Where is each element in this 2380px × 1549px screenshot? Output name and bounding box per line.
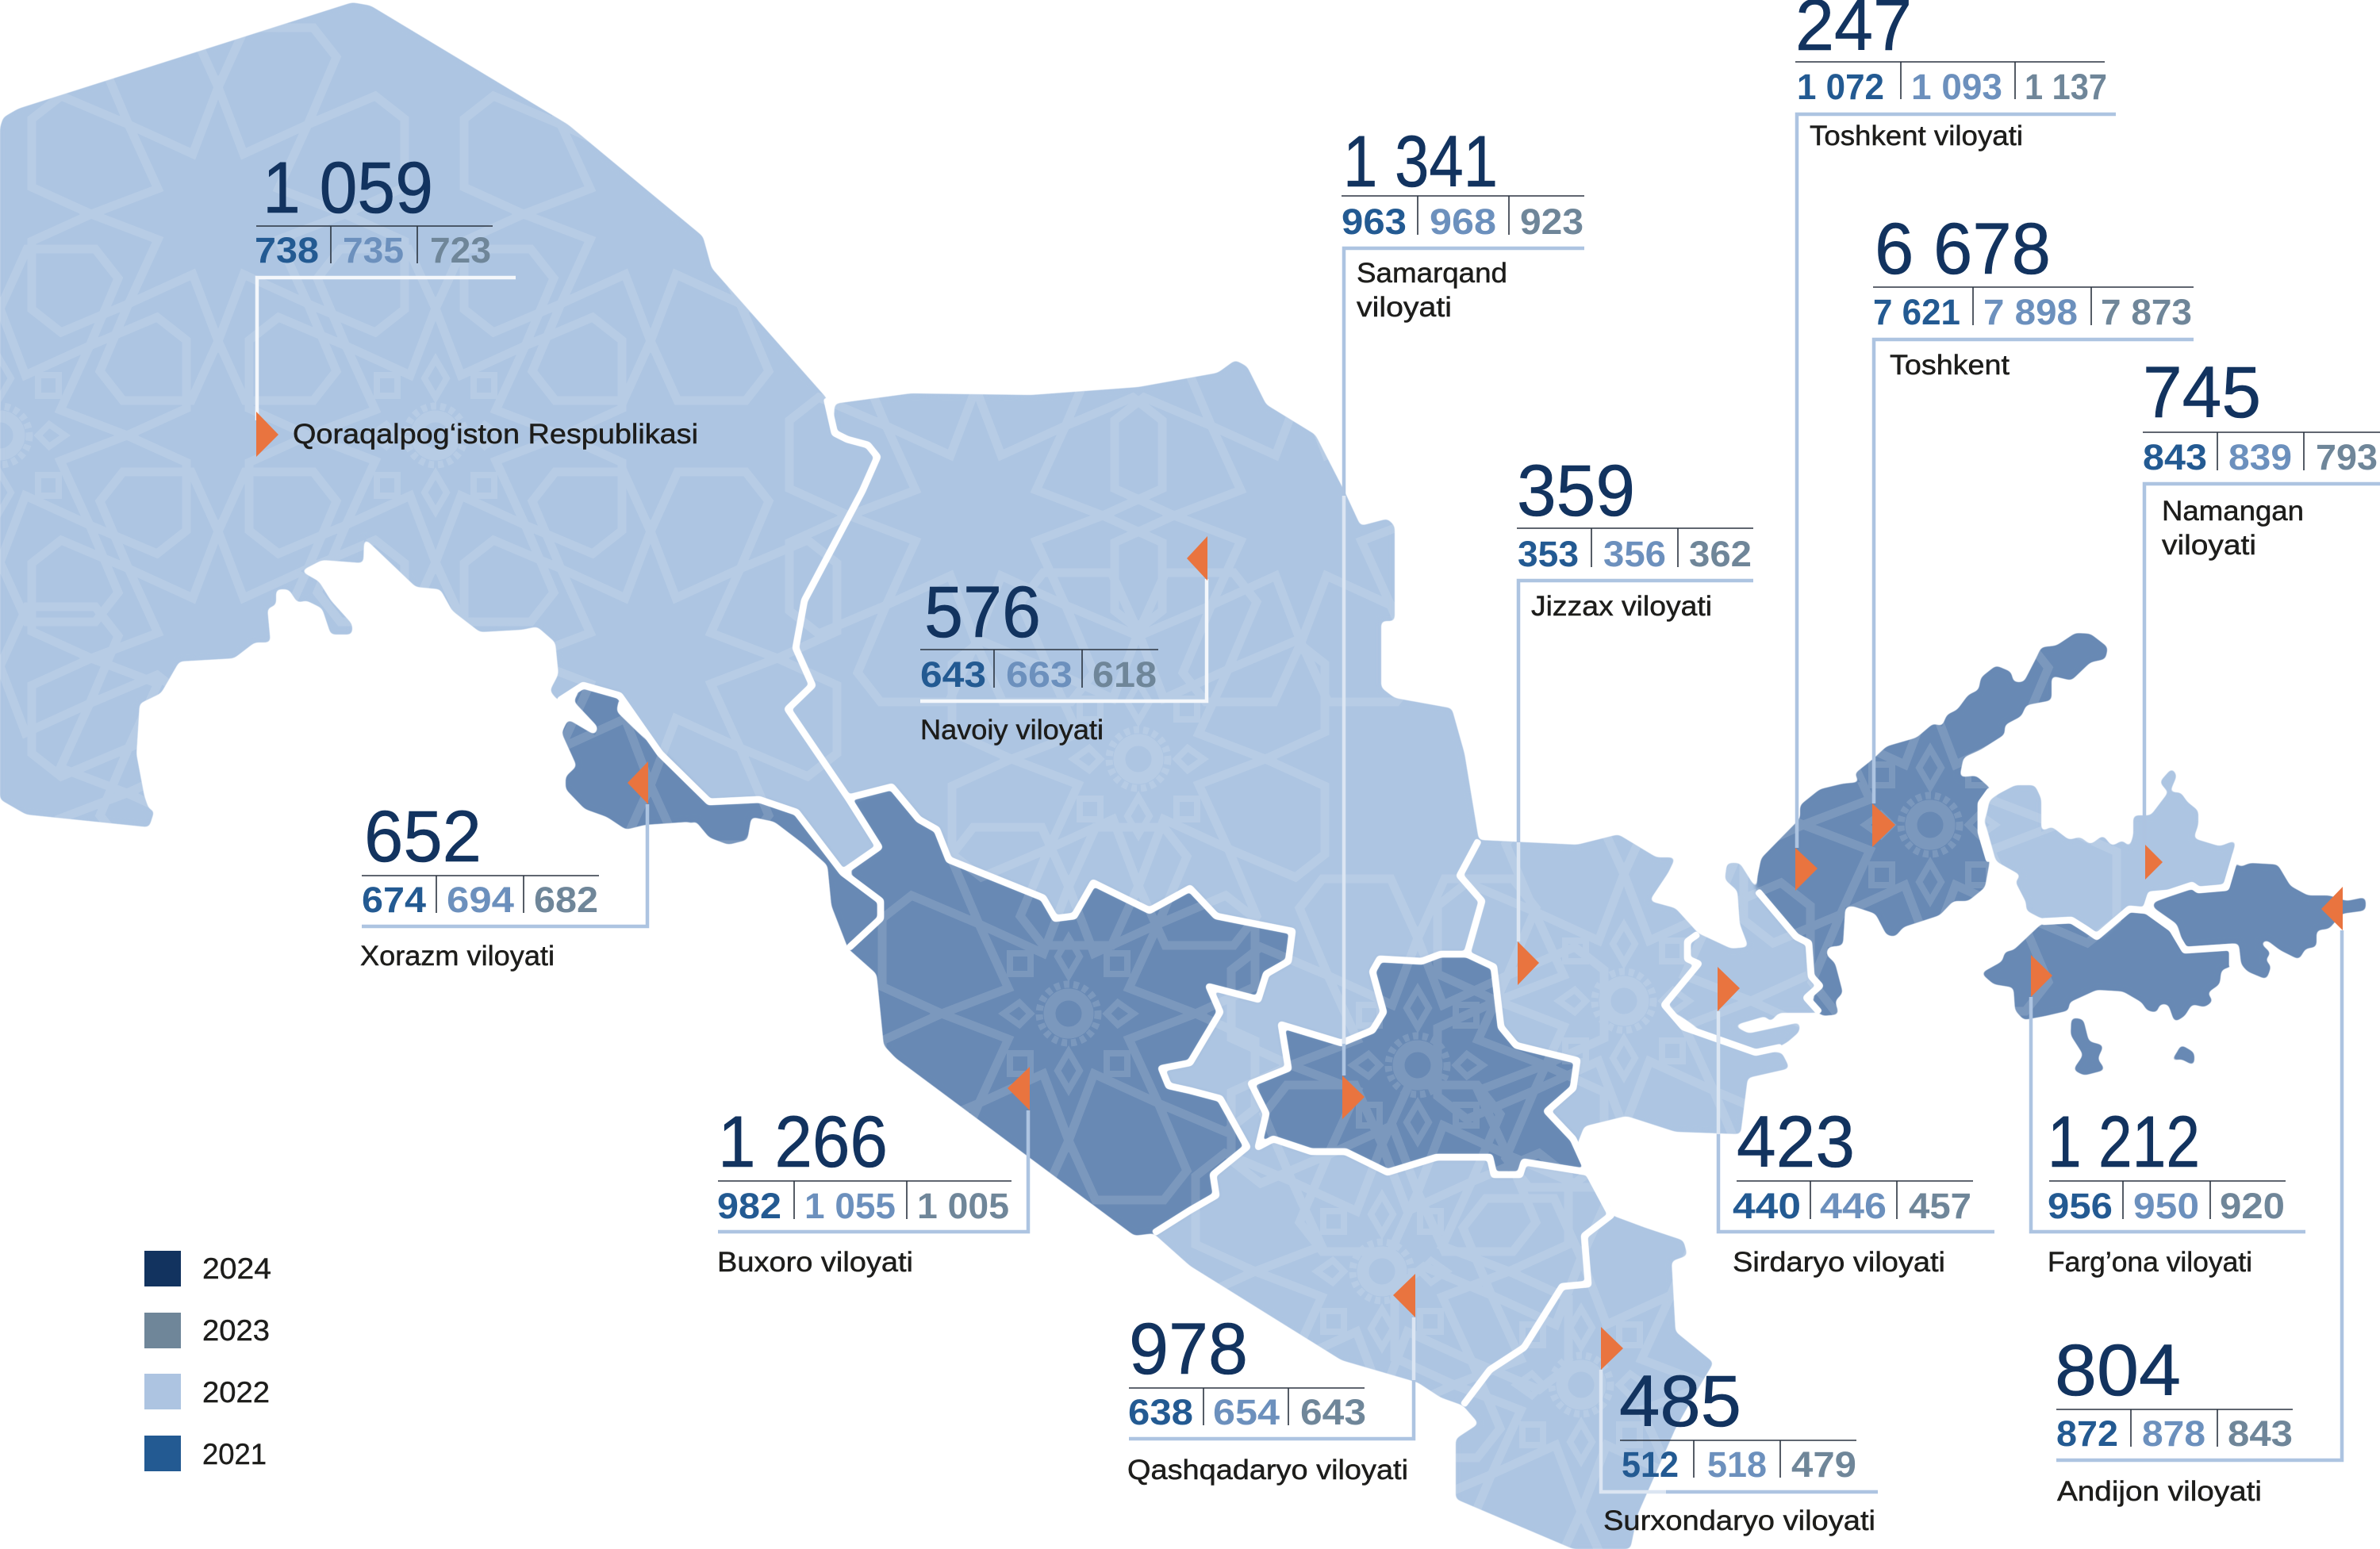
- values 2021 2022 2023: [362, 876, 599, 920]
- label: Buxoro viloyati: [717, 1247, 913, 1278]
- legend item: 2021: [144, 1436, 267, 1471]
- values 2021 2022 2023: 440: [1733, 1186, 1801, 1226]
- marker: [2145, 845, 2163, 880]
- callout: Samarqand viloyati: viloyati: [1357, 292, 1452, 323]
- marker: [256, 412, 278, 457]
- marker: [1187, 536, 1207, 581]
- values 2021 2022 2023: [2143, 432, 2380, 477]
- values 2021 2022 2023: 694: [447, 880, 514, 920]
- callout: Toshkent: [1872, 209, 2194, 847]
- values 2021 2022 2023: 839: [2228, 437, 2292, 477]
- callout: Navoiy viloyati: [920, 536, 1207, 746]
- legend item: 2023: 2023: [202, 1314, 270, 1347]
- value 2024: 1 212: [2048, 1102, 2200, 1183]
- values 2021 2022 2023: 446: [1820, 1186, 1887, 1226]
- legend item: 2024: [144, 1251, 271, 1286]
- values 2021 2022 2023: 7 873: [2101, 292, 2192, 332]
- values 2021 2022 2023: [1128, 1388, 1366, 1432]
- values 2021 2022 2023: [255, 226, 493, 270]
- values 2021 2022 2023: [1873, 287, 2194, 332]
- label: Sirdaryo viloyati: [1733, 1247, 1945, 1278]
- values 2021 2022 2023: 963: [1342, 201, 1407, 242]
- label: Qoraqalpog‘iston Respublikasi: [293, 419, 698, 450]
- legend item: 2024: 2024: [202, 1252, 271, 1285]
- values 2021 2022 2023: 843: [2228, 1413, 2293, 1454]
- region: Surxondaryo viloyati: [1456, 1215, 1714, 1549]
- value 2024: 652: [364, 796, 482, 877]
- region: Xorazm viloyati: [562, 685, 881, 949]
- label: Toshkent viloyati: [1810, 121, 2023, 151]
- values 2021 2022 2023: 654: [1213, 1392, 1280, 1432]
- callout: Buxoro viloyati: [717, 1067, 1030, 1278]
- values 2021 2022 2023: 643: [1300, 1392, 1366, 1432]
- values 2021 2022 2023: 1 137: [2025, 67, 2107, 107]
- values 2021 2022 2023: 682: [534, 880, 598, 920]
- values 2021 2022 2023: 479: [1791, 1444, 1856, 1485]
- region: Farg'ona exclave Sox: [2071, 1018, 2106, 1075]
- value 2024: 745: [2143, 352, 2261, 433]
- label: Qashqadaryo viloyati: [1127, 1455, 1408, 1486]
- values 2021 2022 2023: 7 621: [1873, 292, 1960, 332]
- marker: [1008, 1067, 1030, 1110]
- values 2021 2022 2023: [1517, 528, 1753, 574]
- value 2024: 804: [2055, 1330, 2181, 1411]
- marker: [1795, 848, 1818, 891]
- values 2021 2022 2023: 618: [1092, 654, 1157, 695]
- values 2021 2022 2023: 663: [1006, 654, 1073, 695]
- callout: Qoraqalpog'iston Respublikasi: [255, 148, 698, 457]
- label: Xorazm viloyati: [360, 941, 555, 972]
- values 2021 2022 2023: 356: [1603, 534, 1666, 574]
- value 2024: 978: [1129, 1309, 1248, 1390]
- marker: [628, 761, 648, 804]
- marker: [2321, 887, 2343, 930]
- values 2021 2022 2023: 674: [362, 880, 426, 920]
- value 2024: 1 059: [263, 148, 433, 228]
- values 2021 2022 2023: [920, 650, 1158, 695]
- values 2021 2022 2023: 923: [1520, 201, 1583, 242]
- values 2021 2022 2023: [2048, 1181, 2286, 1226]
- marker: [1718, 967, 1740, 1011]
- values 2021 2022 2023: [1620, 1440, 1856, 1485]
- value 2024: 423: [1737, 1102, 1855, 1183]
- callout: Toshkent viloyati: [1795, 0, 2116, 891]
- value 2024: 1 341: [1343, 121, 1498, 202]
- values 2021 2022 2023: 878: [2142, 1413, 2205, 1454]
- values 2021 2022 2023: 1 072: [1797, 67, 1884, 107]
- marker: [1518, 941, 1539, 985]
- callout: Qashqadaryo viloyati: [1127, 1274, 1415, 1486]
- region: Toshkent viloyati va Toshkent: [1757, 633, 2108, 1016]
- value 2024: 1 266: [718, 1102, 888, 1183]
- callout: Surxondaryo viloyati: [1601, 1327, 1878, 1536]
- label: Samarqand: [1357, 258, 1507, 289]
- label: Farg’ona viloyati: [2048, 1247, 2252, 1278]
- values 2021 2022 2023: [2056, 1409, 2293, 1454]
- values 2021 2022 2023: 723: [430, 230, 491, 270]
- region: Buxoro viloyati: [848, 787, 1292, 1236]
- region: Farg'ona viloyati: [1981, 911, 2232, 1022]
- marker: [1872, 803, 1895, 847]
- marker: [1342, 1075, 1365, 1119]
- callout: Andijon viloyati: [2055, 887, 2343, 1507]
- region: Qoraqalpog'iston Respublikasi: [0, 2, 879, 872]
- value 2024: 576: [924, 572, 1041, 653]
- values 2021 2022 2023: 512: [1622, 1444, 1679, 1485]
- marker: [1393, 1274, 1415, 1317]
- label: Andijon viloyati: [2057, 1476, 2262, 1507]
- legend: [144, 1251, 271, 1471]
- values 2021 2022 2023: 518: [1707, 1444, 1767, 1485]
- legend item: 2021: 2021: [202, 1438, 267, 1470]
- values 2021 2022 2023: [1733, 1181, 1973, 1226]
- values 2021 2022 2023: 843: [2143, 437, 2207, 477]
- region: Andijon viloyati: [2153, 857, 2366, 980]
- label: Jizzax viloyati: [1531, 591, 1712, 622]
- region borders: [559, 398, 2236, 1405]
- values 2021 2022 2023: 362: [1689, 534, 1752, 574]
- region: Qashqadaryo viloyati: [1154, 1139, 1611, 1405]
- values 2021 2022 2023: 872: [2056, 1413, 2118, 1454]
- label: Toshkent: [1890, 350, 2010, 381]
- values 2021 2022 2023: 1 093: [1911, 67, 2002, 107]
- values 2021 2022 2023: 950: [2133, 1186, 2199, 1226]
- callout: Farg'ona viloyati: [2031, 955, 2305, 1278]
- values 2021 2022 2023: 920: [2220, 1186, 2285, 1226]
- values 2021 2022 2023: 968: [1430, 201, 1496, 242]
- region: Samarqand viloyati: [1251, 954, 1588, 1175]
- label: Namangan: [2162, 496, 2304, 527]
- value 2024: 485: [1619, 1361, 1741, 1442]
- values 2021 2022 2023: 1 005: [917, 1186, 1009, 1226]
- callout: Namangan viloyati: [2143, 352, 2380, 880]
- values 2021 2022 2023: 956: [2048, 1186, 2113, 1226]
- values 2021 2022 2023: [1342, 196, 1584, 242]
- callout: Xorazm viloyati: [360, 761, 648, 972]
- values 2021 2022 2023: 643: [920, 654, 986, 695]
- values 2021 2022 2023: 735: [343, 230, 404, 270]
- region: Navoiy viloyati: [788, 360, 1482, 1147]
- values 2021 2022 2023: 793: [2316, 437, 2378, 477]
- values 2021 2022 2023: [1795, 62, 2107, 107]
- value 2024: 359: [1517, 451, 1635, 531]
- callout: Samarqand viloyati: [1342, 121, 1584, 1119]
- callout: Sirdaryo viloyati: [1718, 967, 1994, 1278]
- values 2021 2022 2023: 738: [255, 230, 319, 270]
- value 2024: 6 678: [1875, 209, 2051, 289]
- marker: [2031, 955, 2052, 997]
- region: Namangan viloyati: [1985, 768, 2236, 935]
- values 2021 2022 2023: [717, 1181, 1012, 1226]
- values 2021 2022 2023: 1 055: [804, 1186, 896, 1226]
- legend item: 2022: [144, 1374, 270, 1409]
- values 2021 2022 2023: 353: [1518, 534, 1579, 574]
- marker: [1601, 1327, 1623, 1370]
- region: Sirdaryo viloyati: [1664, 863, 1820, 1053]
- legend item: 2023: [144, 1313, 270, 1348]
- label: Navoiy viloyati: [920, 715, 1104, 746]
- values 2021 2022 2023: 982: [717, 1186, 781, 1226]
- region: Farg'ona exclave Shohimardon: [2170, 1045, 2194, 1066]
- region: Jizzax viloyati: [1460, 834, 1790, 1172]
- values 2021 2022 2023: 638: [1128, 1392, 1193, 1432]
- values 2021 2022 2023: 7 898: [1983, 292, 2078, 332]
- callout: Jizzax viloyati: [1517, 451, 1753, 985]
- callout: Namangan viloyati: viloyati: [2162, 530, 2256, 561]
- label: Surxondaryo viloyati: [1603, 1505, 1875, 1536]
- values 2021 2022 2023: 457: [1909, 1186, 1971, 1226]
- legend item: 2022: 2022: [202, 1376, 270, 1409]
